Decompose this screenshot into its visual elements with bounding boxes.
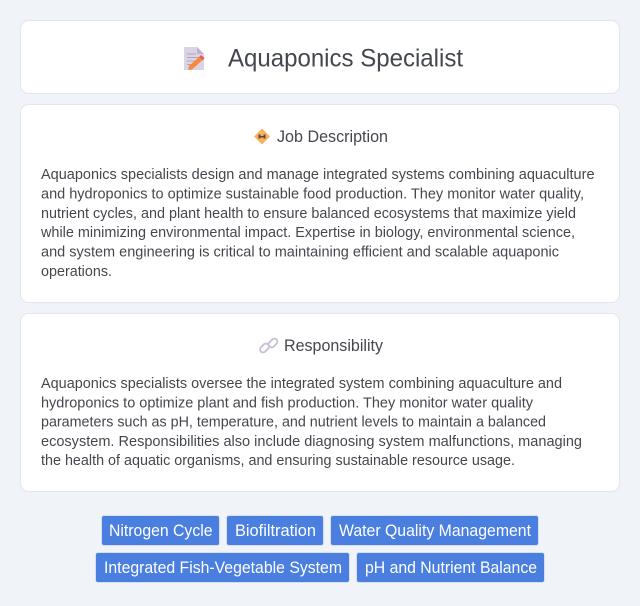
title: Aquaponics Specialist (228, 44, 463, 72)
text block: job description: and hydroponics to optimize sustainable food production. They monitor water quality, (41, 186, 584, 202)
text block: responsibility (41, 376, 582, 469)
text block: responsibility: Aquaponics specialists oversee the integrated system combining aquaculture and (41, 376, 562, 392)
panel: job description (20, 104, 620, 302)
tag: integrated fish-vegetable system (96, 552, 350, 582)
icon: document with pencil (184, 47, 204, 70)
text block: responsibility: parameters such as pH, temperature, and nutrient levels to maintain a balanced (41, 415, 546, 431)
panel: responsibility (20, 314, 620, 492)
icon: diamond sign (254, 128, 270, 144)
text block: job description (40, 167, 594, 280)
tag: ph and nutrient balance (356, 552, 544, 582)
tag: nitrogen cycle (102, 516, 220, 546)
panel: header (20, 20, 620, 94)
text block: job description: operations. (41, 264, 112, 280)
tag: water quality management (330, 516, 538, 546)
tag: nitrogen cycle: Nitrogen Cycle (109, 521, 212, 540)
text block: job description: nutrient cycles, and plant health to ensure balanced ecosystems that maximize yield (41, 206, 576, 222)
text block: job description: Aquaponics specialists design and manage integrated systems combining aquaculture (41, 167, 594, 183)
tag: biofiltration (226, 516, 324, 546)
text block: responsibility: the health of aquatic organisms, and ensuring sustainable resource usage. (41, 453, 515, 469)
text block: responsibility: hydroponics to optimize plant and fish production. They monitor water quality (41, 395, 534, 411)
tag: ph and nutrient balance: pH and Nutrient Balance (365, 558, 537, 577)
heading: responsibility: Responsibility (284, 336, 384, 355)
text block: responsibility: ecosystem. Responsibilities also include diagnosing system malfunctions, managing (41, 434, 582, 450)
tag: water quality management: Water Quality Management (339, 521, 531, 540)
text block: job description: and system engineering is critical to maintaining efficient and scalable aquaponic (41, 245, 559, 261)
heading: job description: Job Description (277, 127, 388, 146)
text block: job description: while minimizing environmental impact. Expertise in biology, environmental science, (40, 225, 575, 241)
tag: integrated fish-vegetable system: Integrated Fish-Vegetable System (104, 558, 342, 577)
tag: biofiltration: Biofiltration (235, 521, 316, 540)
icon: chain link (259, 337, 279, 354)
